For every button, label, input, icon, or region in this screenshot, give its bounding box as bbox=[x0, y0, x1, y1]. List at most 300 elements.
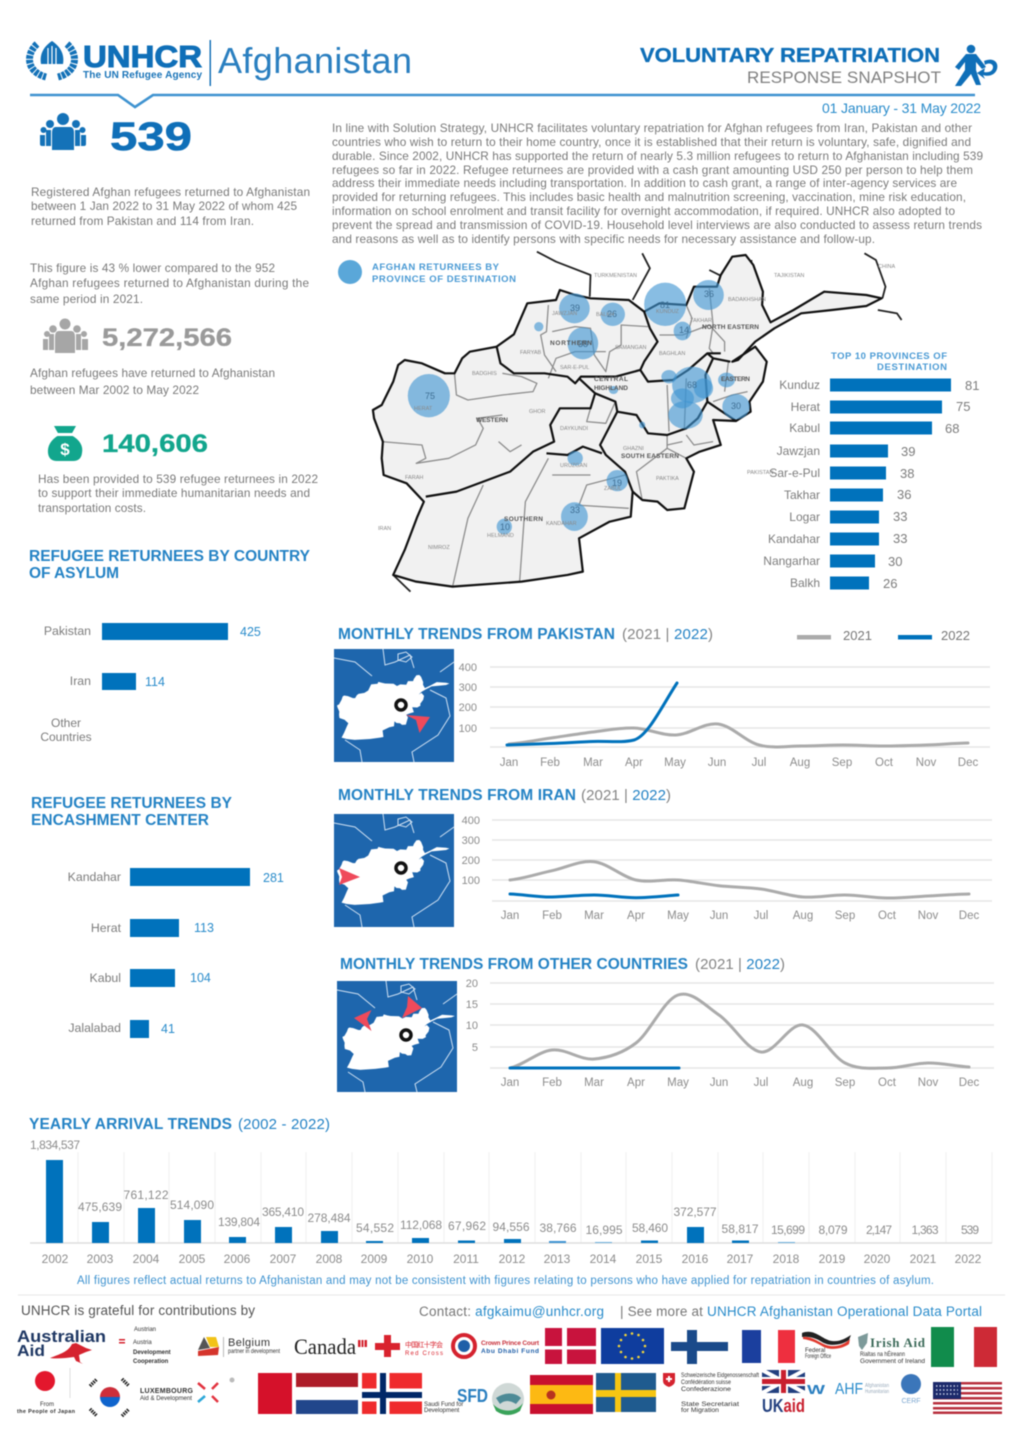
logo: Switzerland: State Secretariat bbox=[681, 1402, 739, 1408]
map labels: TAKHAR bbox=[690, 318, 712, 324]
panel: monthly trends from Pakistan bbox=[334, 626, 990, 769]
chart: top 10 provinces of destination: Jawzjan bbox=[777, 444, 820, 458]
flag: Finland bbox=[671, 1330, 728, 1364]
chart: top 10 provinces of destination: 26 bbox=[883, 576, 897, 591]
panel: returnees by encashment center bbox=[31, 795, 284, 1038]
bar chart: 2,147 bbox=[866, 1223, 892, 1237]
logo: Japan: the People of Japan bbox=[17, 1409, 76, 1415]
line 2021 bbox=[510, 994, 969, 1068]
logo: SFD: SFD bbox=[457, 1386, 488, 1406]
map labels: SAR-E-PUL bbox=[560, 365, 589, 371]
chart: top 10 provinces of destination: Balkh bbox=[790, 576, 820, 590]
bar chart: 112,068 bbox=[400, 1218, 442, 1232]
line chart: Mar bbox=[584, 1077, 604, 1089]
logo: Austrian Development Cooperation: Development bbox=[133, 1350, 171, 1356]
bar: Herat bbox=[91, 919, 214, 937]
bar: Iran: Iran bbox=[70, 674, 91, 688]
logo: Chinese red cross: 中国红十字会 bbox=[405, 1340, 443, 1349]
line chart: 10 bbox=[466, 1020, 478, 1032]
logo: Germany: Federal bbox=[805, 1348, 825, 1354]
heading: MONTHLY TRENDS FROM IRAN bbox=[338, 787, 576, 804]
province boundaries bbox=[382, 288, 748, 587]
contact: Contact: afgkaimu@unhcr.org bbox=[419, 1304, 604, 1319]
map labels: PAKISTAN bbox=[747, 470, 773, 476]
line chart: Oct bbox=[878, 1077, 897, 1089]
text block: introduction: and reasons as well as to identify persons with specific needs for necessary assistance and follow-up. bbox=[332, 232, 875, 246]
header rule with pointer bbox=[30, 95, 975, 107]
flag: European Union bbox=[601, 1328, 664, 1364]
bar: Pakistan bbox=[44, 623, 261, 640]
logo: UK aid: UKaid bbox=[762, 1396, 805, 1416]
icon: UNHCR wreath bbox=[30, 41, 74, 77]
map labels bbox=[378, 264, 895, 551]
text block: comparison to 2021 bbox=[30, 261, 309, 306]
chart: top 10 provinces of destination: Sar-e-Pul bbox=[769, 466, 820, 480]
logo: CERF bbox=[901, 1374, 921, 1405]
logo: SFD bbox=[424, 1383, 524, 1415]
line chart: Nov bbox=[918, 1077, 938, 1089]
bar chart: 2013 bbox=[544, 1252, 571, 1266]
line chart: Aug bbox=[790, 757, 810, 769]
map values: 36 bbox=[704, 289, 714, 299]
bar chart: 67,962 bbox=[448, 1219, 486, 1233]
label: other countries: Other bbox=[51, 716, 81, 730]
agency name: The UN Refugee Agency bbox=[83, 70, 202, 81]
map values: 26 bbox=[607, 309, 617, 319]
heading: MONTHLY TRENDS FROM PAKISTAN bbox=[338, 626, 615, 643]
chart: top 10 provinces of destination: 38 bbox=[900, 466, 914, 481]
flag: Sweden bbox=[596, 1373, 656, 1412]
logo: World Humanitarian Fund bbox=[807, 1381, 889, 1398]
chart: top 10 provinces of destination: 33 bbox=[893, 509, 907, 524]
text block: introduction: information on school enrolment and transit facility for overnight accommodation, if required. UNHCR also adopted to bbox=[332, 204, 955, 218]
chart: top 10 provinces of destination: 30 bbox=[888, 554, 902, 569]
panel: key figure 539 bbox=[31, 113, 310, 228]
UNHCR logo bbox=[30, 39, 202, 81]
logo: Australian Aid: Australian bbox=[17, 1327, 106, 1346]
chart heading: DESTINATION bbox=[877, 362, 947, 373]
marker bbox=[396, 700, 406, 710]
line chart: Apr bbox=[627, 1077, 645, 1089]
legend: 2022 bbox=[941, 628, 970, 643]
bar chart: 8,079 bbox=[818, 1223, 848, 1237]
logo: Germany bbox=[802, 1332, 851, 1360]
logo: Canada: Canada bbox=[294, 1334, 356, 1359]
description: Afghan refugees have returned to Afghanistan bbox=[30, 366, 275, 380]
description: returned from Pakistan and 114 from Iran. bbox=[31, 214, 254, 228]
logo: Irish Aid: Irish Aid bbox=[870, 1335, 926, 1350]
flag: France bbox=[742, 1330, 795, 1363]
line chart: Jul bbox=[752, 757, 766, 769]
map labels: FARAH bbox=[405, 475, 423, 481]
line chart: Jul bbox=[754, 910, 768, 922]
logo: Irish Aid bbox=[858, 1333, 926, 1365]
heading: ENCASHMENT CENTER bbox=[31, 812, 209, 829]
panel: total returnees bbox=[30, 318, 275, 397]
logo: Belgium bbox=[198, 1337, 280, 1357]
line chart: 200 bbox=[459, 702, 477, 714]
text block: comparison to 2021: same period in 2021. bbox=[30, 292, 143, 306]
line 2022 bbox=[507, 683, 677, 745]
arrow bbox=[339, 868, 360, 885]
bar chart: 2006 bbox=[224, 1252, 251, 1266]
line chart: Jun bbox=[708, 757, 726, 769]
bar chart: 16,995 bbox=[586, 1223, 623, 1237]
arrow bbox=[406, 715, 430, 733]
line chart: 400 bbox=[462, 815, 480, 827]
panel: returnees by country of asylum bbox=[29, 548, 311, 744]
line chart: Nov bbox=[916, 757, 936, 769]
bar: Herat: 113 bbox=[194, 921, 214, 935]
flag: Spain bbox=[530, 1375, 593, 1414]
bar: Jalalabad: 41 bbox=[161, 1022, 175, 1036]
map labels: SOUTHERN bbox=[504, 516, 543, 523]
text block: introduction: In line with Solution Strategy, UNHCR facilitates voluntary repatriation for Afghan refugees from Iran, Pakistan and other bbox=[332, 121, 972, 135]
bar chart: 2010 bbox=[407, 1252, 434, 1266]
logo: Irish Aid: Government of Ireland bbox=[860, 1359, 925, 1365]
legend: map bubble bbox=[338, 260, 516, 285]
description: between Mar 2002 to May 2022 bbox=[30, 383, 199, 397]
line chart bbox=[459, 662, 990, 769]
chart: top 10 provinces of destination: 81 bbox=[965, 378, 979, 393]
line chart: Jan bbox=[500, 757, 518, 769]
map labels: BALKH bbox=[596, 312, 614, 318]
logo: Switzerland: Confederazione bbox=[681, 1387, 732, 1393]
chart: top 10 provinces of destination: 75 bbox=[956, 399, 970, 414]
flag: United States bbox=[933, 1382, 1002, 1414]
description: transportation costs. bbox=[38, 501, 146, 515]
text block: introduction: provided for returning refugees. This includes basic health and malnutrition screening, vaccination, mine risk education, bbox=[332, 190, 966, 204]
text block: introduction: durable. Since 2002, UNHCR has supported the return of nearly 5.3 million refugees to return to Afghanistan including 539 bbox=[332, 149, 983, 163]
bar chart: 2008 bbox=[316, 1252, 343, 1266]
regional boundaries bbox=[373, 255, 882, 587]
map values: 30 bbox=[731, 401, 741, 411]
line chart: May bbox=[664, 757, 686, 769]
line chart bbox=[462, 815, 992, 922]
bar chart: 2009 bbox=[361, 1252, 388, 1266]
bar: Iran bbox=[70, 673, 165, 690]
bar chart: 58,817 bbox=[722, 1222, 759, 1236]
logo: Luxembourg: Aid & Development bbox=[140, 1396, 192, 1402]
bar chart: 15,699 bbox=[771, 1223, 805, 1237]
chart: top 10 provinces of destination: 33 bbox=[893, 531, 907, 546]
bar chart: 539 bbox=[961, 1223, 979, 1237]
chart: top 10 provinces of destination: Herat bbox=[791, 400, 821, 414]
heading: OF ASYLUM bbox=[29, 565, 119, 582]
logo: Switzerland: Confédération suisse bbox=[681, 1380, 732, 1386]
line chart: 100 bbox=[459, 723, 477, 735]
line chart: 400 bbox=[459, 662, 477, 674]
bar chart bbox=[30, 1138, 992, 1266]
line chart: Sep bbox=[835, 910, 855, 922]
line chart: Sep bbox=[835, 1077, 855, 1089]
donor logos bbox=[17, 1327, 1002, 1416]
flag: Italy bbox=[931, 1327, 997, 1367]
line chart: Jul bbox=[754, 1077, 768, 1089]
line 2021 bbox=[510, 862, 969, 898]
map labels: JAWZJAN bbox=[552, 311, 577, 317]
line chart: 300 bbox=[459, 682, 477, 694]
icon: people bbox=[40, 113, 86, 150]
line chart: Jun bbox=[710, 1077, 728, 1089]
contributions heading: UNHCR is grateful for contributions by bbox=[21, 1303, 255, 1318]
date: 01 January - 31 May 2022 bbox=[822, 100, 981, 116]
line 2021 bbox=[509, 724, 968, 747]
text block: introduction: address their immediate needs including transportation. In addition to cash grant, a range of inter-agency services are bbox=[332, 176, 957, 190]
line chart: 200 bbox=[462, 855, 480, 867]
text block: introduction: prevent the spread and transmission of COVID-19. Household level interviews are also conducted to assess return trends bbox=[332, 218, 982, 232]
bar chart: 2002 bbox=[42, 1252, 69, 1266]
line chart: Feb bbox=[542, 910, 562, 922]
line chart: Dec bbox=[959, 1077, 979, 1089]
bar chart: 2007 bbox=[270, 1252, 297, 1266]
bar chart: 514,090 bbox=[170, 1198, 214, 1212]
map values: 39 bbox=[570, 303, 580, 313]
legend: map bubble: PROVINCE OF DESTINATION bbox=[372, 274, 516, 285]
line chart: Oct bbox=[875, 757, 894, 769]
map labels: GHOR bbox=[529, 409, 546, 415]
UNHCR wordmark: UNHCR bbox=[83, 39, 202, 74]
line chart: Mar bbox=[583, 757, 603, 769]
line chart: Apr bbox=[625, 757, 643, 769]
map labels: BADAKHSHAN bbox=[728, 297, 766, 303]
logo: Belgium: partner in development bbox=[228, 1349, 280, 1355]
logo: Switzerland: Schweizerische Eidgenossenschaft bbox=[681, 1373, 759, 1379]
line chart: 100 bbox=[462, 875, 480, 887]
logo: Belgium: Belgium bbox=[228, 1337, 270, 1349]
logo: Switzerland: for Migration bbox=[681, 1408, 719, 1414]
logo: Chinese red cross bbox=[375, 1335, 443, 1357]
bar: Iran: 114 bbox=[145, 675, 165, 689]
data portal link: | See more at UNHCR Afghanistan Operational Data Portal bbox=[620, 1304, 982, 1319]
chart: top 10 provinces of destination: Kabul bbox=[789, 421, 820, 435]
map labels: BADGHIS bbox=[472, 371, 497, 377]
line chart: Mar bbox=[584, 910, 604, 922]
bar chart: 2004 bbox=[133, 1252, 160, 1266]
line chart: Dec bbox=[958, 757, 978, 769]
map labels: NORTH EASTERN bbox=[702, 324, 759, 331]
line chart: 300 bbox=[462, 835, 480, 847]
legend: 2021 bbox=[843, 628, 872, 643]
flag: Netherlands bbox=[296, 1373, 358, 1414]
chart: top 10 provinces of destination: 68 bbox=[945, 421, 959, 436]
line chart: Aug bbox=[793, 1077, 813, 1089]
logo: Japan: From bbox=[40, 1402, 54, 1408]
bar chart: 1,834,537 bbox=[30, 1138, 80, 1152]
line chart: Jan bbox=[501, 1077, 519, 1089]
arrow: north east bbox=[402, 996, 422, 1018]
heading: REFUGEE RETURNEES BY COUNTRY bbox=[29, 548, 311, 565]
logo: Austrian Development Cooperation bbox=[119, 1327, 171, 1365]
flag: Norway bbox=[362, 1373, 422, 1414]
line chart: May bbox=[667, 1077, 689, 1089]
bar chart: 2014 bbox=[590, 1252, 617, 1266]
logo: Luxembourg bbox=[140, 1378, 234, 1402]
logo: emblem: Abu Dhabi Fund bbox=[481, 1348, 539, 1355]
description: to support their immediate humanitarian needs and bbox=[38, 486, 310, 500]
chart: top 10 provinces of destination: Logar bbox=[789, 510, 820, 524]
map labels: CENTRAL bbox=[594, 376, 628, 383]
heading: (2021 | 2022) bbox=[581, 787, 671, 804]
bar chart: 2020 bbox=[864, 1252, 891, 1266]
bar chart: 2021 bbox=[910, 1252, 937, 1266]
map labels: GHAZNI bbox=[623, 446, 644, 452]
map labels: HIGHLAND bbox=[594, 385, 628, 392]
arrow: north west bbox=[354, 1010, 372, 1031]
map labels: URUZGAN bbox=[560, 463, 587, 469]
logo: Austrian Development Cooperation: Austrian bbox=[134, 1327, 156, 1333]
bar chart: 372,577 bbox=[674, 1205, 717, 1219]
map thumbnail bbox=[334, 649, 454, 762]
line chart: Dec bbox=[959, 910, 979, 922]
header bbox=[30, 39, 997, 116]
chart heading bbox=[831, 351, 947, 373]
chart: top 10 provinces of destination bbox=[763, 351, 979, 591]
footnote: All figures reflect actual returns to Afghanistan and may not be consistent with figures relating to persons who have applied for repatriation in countries of asylum. bbox=[77, 1275, 934, 1287]
line chart: Feb bbox=[542, 1077, 562, 1089]
bar chart: 2011 bbox=[453, 1252, 479, 1266]
bar: Pakistan: Pakistan bbox=[44, 624, 91, 638]
chart: top 10 provinces of destination: Kandahar bbox=[768, 532, 820, 546]
map values: 68 bbox=[687, 380, 697, 390]
logo: CERF: CERF bbox=[901, 1398, 921, 1405]
panel: cash grant bbox=[38, 426, 318, 515]
bar: Kabul bbox=[90, 969, 211, 987]
big number: 539 bbox=[110, 115, 192, 159]
logo: Switzerland bbox=[663, 1373, 759, 1414]
bar chart: 365,410 bbox=[262, 1205, 304, 1219]
line chart: 20 bbox=[466, 978, 478, 990]
bar chart: 761,122 bbox=[124, 1188, 169, 1202]
line 2022 bbox=[510, 1066, 679, 1070]
bar chart: 2019 bbox=[819, 1252, 846, 1266]
heading: YEARLY ARRIVAL TRENDS bbox=[29, 1116, 232, 1133]
description bbox=[30, 366, 275, 397]
bar chart: 475,639 bbox=[78, 1200, 122, 1214]
logo: World Humanitarian Fund: W bbox=[807, 1382, 826, 1397]
heading bbox=[29, 1116, 330, 1133]
logo: SFD: Development bbox=[424, 1408, 460, 1414]
logo: Australian Aid: Aid bbox=[17, 1343, 45, 1360]
map values: 10 bbox=[500, 522, 510, 532]
bar chart: 58,460 bbox=[632, 1221, 668, 1235]
marker bbox=[401, 1030, 411, 1040]
logo: World Humanitarian Fund: Afghanistan bbox=[865, 1383, 889, 1389]
logo: Austrian Development Cooperation: Cooperation bbox=[133, 1359, 169, 1365]
line 2022 bbox=[510, 894, 678, 898]
map values bbox=[425, 289, 741, 532]
bar chart: 139,804 bbox=[218, 1215, 260, 1229]
icon: money bag: $ bbox=[60, 440, 70, 459]
chart: top 10 provinces of destination: 36 bbox=[897, 487, 911, 502]
logo: emblem bbox=[453, 1335, 540, 1357]
logo: Germany: Foreign Office bbox=[805, 1354, 831, 1360]
panel: monthly trends from other countries bbox=[337, 956, 994, 1092]
text block: introduction: countries who wish to return to their home country, once it is established that their return is voluntary, safe, dignified and bbox=[332, 135, 971, 149]
line chart: 15 bbox=[466, 999, 478, 1011]
footer text bbox=[21, 1303, 982, 1319]
flag: South Korea bbox=[90, 1379, 129, 1416]
map labels: TURKMENISTAN bbox=[594, 273, 637, 279]
heading bbox=[29, 548, 311, 582]
map thumbnail bbox=[337, 981, 457, 1092]
bar chart: 278,484 bbox=[308, 1211, 351, 1225]
icon: people grey bbox=[43, 318, 88, 353]
bar: Kabul: Kabul bbox=[90, 971, 121, 985]
line chart: Jan bbox=[501, 910, 519, 922]
logo: Irish Aid: Rialtas na hÉireann bbox=[860, 1351, 905, 1358]
heading: (2021 | 2022) bbox=[622, 626, 713, 643]
map labels: CHINA bbox=[878, 264, 895, 270]
line chart: Oct bbox=[878, 910, 897, 922]
map values: 38 bbox=[578, 339, 588, 349]
line chart: Sep bbox=[832, 757, 852, 769]
bar chart: 1,363 bbox=[912, 1223, 939, 1237]
description: Has been provided to 539 refugee returnees in 2022 bbox=[38, 472, 318, 486]
heading: REFUGEE RETURNEES BY bbox=[31, 795, 233, 812]
bar: Kandahar bbox=[68, 868, 284, 886]
description: Registered Afghan refugees returned to Afghanistan bbox=[31, 185, 310, 199]
chart: top 10 provinces of destination: Takhar bbox=[784, 488, 820, 502]
title: Afghanistan: Afghanistan bbox=[218, 40, 412, 81]
logo: SFD: Saudi Fund for bbox=[424, 1402, 463, 1408]
map labels: FARYAB bbox=[520, 350, 542, 356]
text block: introduction bbox=[332, 121, 983, 246]
map labels: KANDAHAR bbox=[546, 521, 577, 527]
line chart: 5 bbox=[472, 1042, 478, 1054]
heading: (2021 | 2022) bbox=[695, 956, 785, 973]
line chart: Jun bbox=[710, 910, 728, 922]
chart: top 10 provinces of destination: 39 bbox=[901, 444, 915, 459]
map labels: NIMROZ bbox=[428, 545, 450, 551]
bar chart: 2005 bbox=[179, 1252, 206, 1266]
map labels: NORTHERN bbox=[550, 340, 592, 347]
bar chart: 2018 bbox=[773, 1252, 800, 1266]
bar: Pakistan: 425 bbox=[240, 625, 261, 639]
panel: yearly arrival trends bbox=[29, 1116, 992, 1287]
icon: money bag bbox=[48, 426, 82, 461]
map values: 81 bbox=[660, 300, 670, 310]
flag: Denmark bbox=[545, 1328, 596, 1364]
logo: Austrian Development Cooperation: Austria bbox=[133, 1340, 152, 1346]
map values: 14 bbox=[679, 325, 689, 335]
chart heading: TOP 10 PROVINCES OF bbox=[831, 351, 947, 362]
map labels: EASTERN bbox=[721, 376, 750, 383]
map of Afghanistan bbox=[373, 252, 902, 592]
map labels: DAYKUNDI bbox=[560, 426, 588, 432]
line chart bbox=[466, 978, 994, 1089]
map labels: TAJIKISTAN bbox=[774, 273, 804, 279]
number: 140,606 bbox=[102, 430, 208, 458]
map labels: IRAN bbox=[378, 526, 391, 532]
bar chart: 2016 bbox=[682, 1252, 709, 1266]
flag: red block bbox=[258, 1373, 292, 1414]
legend: map bubble: AFGHAN RETURNEES BY bbox=[372, 262, 500, 273]
logo: Japan bbox=[17, 1368, 76, 1415]
marker bbox=[396, 863, 406, 873]
map labels: PAKTIKA bbox=[656, 476, 679, 482]
bar chart: 54,552 bbox=[356, 1221, 394, 1235]
logo: Chinese red cross: Red Cross bbox=[405, 1351, 443, 1357]
panel: returnee map bbox=[338, 252, 902, 592]
bar: Herat: Herat bbox=[91, 921, 122, 935]
logo: UK aid bbox=[762, 1370, 805, 1416]
bar chart: 2003 bbox=[87, 1252, 114, 1266]
bar chart: 38,766 bbox=[540, 1221, 577, 1235]
logo: Australian Aid bbox=[17, 1327, 106, 1364]
description bbox=[31, 185, 310, 228]
heading bbox=[31, 795, 233, 829]
